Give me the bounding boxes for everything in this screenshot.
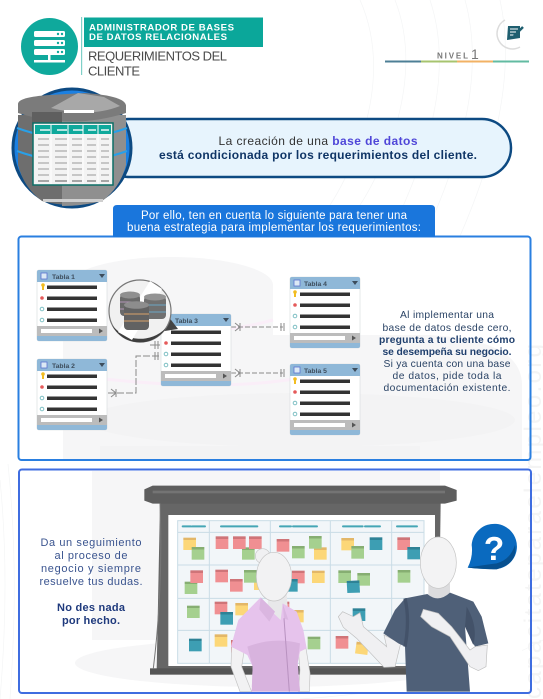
callout: main statement: La creación de una base de datos	[218, 134, 418, 148]
text: follow-up advice: por hecho.	[62, 615, 120, 627]
callout: main statement: está condicionada por los requerimientos del cliente.	[159, 148, 477, 162]
text: implementation advice: Si ya cuenta con una base	[384, 359, 511, 370]
text: follow-up advice: Da un seguimiento	[40, 537, 142, 549]
text: follow-up advice: al proceso de	[54, 550, 128, 562]
connector: tabla 2 to tabla 3	[108, 341, 160, 397]
callout: main statement	[100, 119, 511, 177]
level indicator: NIVEL	[437, 52, 468, 60]
projection screen	[144, 486, 457, 675]
icon: magnifier with databases	[109, 280, 178, 342]
text: follow-up advice: No des nada	[57, 602, 126, 614]
icon: database with table	[13, 89, 131, 207]
divider line	[81, 17, 82, 75]
header: subject title: REQUERIMIENTOS DEL	[88, 48, 227, 64]
text: implementation advice: base de datos desde cero,	[382, 323, 512, 334]
background database watermark	[63, 257, 522, 459]
connector: tabla 3 to tabla 5	[231, 369, 284, 377]
level indicator	[385, 46, 529, 62]
figure: man in dark t-shirt	[338, 537, 488, 692]
icon: question speech bubble: ?	[484, 531, 504, 568]
panel: follow-up process	[19, 470, 531, 693]
table: Tabla 5	[290, 364, 360, 435]
text: follow-up advice: resuelve tus dudas.	[40, 576, 142, 588]
sticky notes	[183, 536, 420, 655]
table: Tabla 5: Tabla 5	[304, 368, 327, 375]
connector: tabla 3 to tabla 4	[231, 323, 284, 331]
table: Tabla 2: Tabla 2	[52, 363, 75, 370]
icon: activity document	[497, 20, 523, 49]
text: implementation advice: se desempeña su negocio.	[382, 347, 512, 358]
banner: intro to strategy: Por ello, ten en cuenta lo siguiente para tener una	[141, 210, 408, 222]
banner: intro to strategy	[113, 205, 435, 237]
text: implementation advice: pregunta a tu cliente cómo	[379, 335, 515, 346]
header: course title	[84, 18, 263, 47]
table: Tabla 3	[161, 314, 231, 386]
panel: table diagram	[18, 236, 530, 460]
table: Tabla 1	[37, 270, 107, 341]
text: implementation advice: Al implementar una	[400, 310, 494, 321]
level indicator: 1	[471, 46, 479, 62]
header: course logo	[21, 18, 78, 75]
header: subject title: CLIENTE	[88, 64, 140, 78]
text: implementation advice: de datos, pide toda la	[392, 371, 502, 382]
text: implementation advice: documentación existente.	[384, 383, 510, 394]
banner: intro to strategy: buena estrategia para implementar los requerimientos:	[127, 222, 421, 234]
figure: woman in pink blouse	[231, 549, 310, 692]
table: Tabla 2	[37, 359, 107, 430]
table: Tabla 4	[290, 277, 360, 348]
illustration: kanban projection screen with presenters	[144, 486, 517, 692]
table: Tabla 3: Tabla 3	[175, 318, 198, 325]
background database watermark	[75, 471, 465, 687]
header: course title: DE DATOS RELACIONALES	[89, 32, 228, 43]
icon: question speech bubble	[468, 524, 517, 569]
header: course title: ADMINISTRADOR DE BASES	[89, 22, 235, 34]
table: Tabla 4: Tabla 4	[304, 281, 327, 288]
text: implementation advice	[379, 310, 515, 394]
text: follow-up advice	[40, 537, 142, 627]
table: Tabla 1: Tabla 1	[52, 274, 75, 281]
header: subject title	[88, 48, 227, 78]
text: follow-up advice: negocio y siempre	[41, 563, 141, 575]
